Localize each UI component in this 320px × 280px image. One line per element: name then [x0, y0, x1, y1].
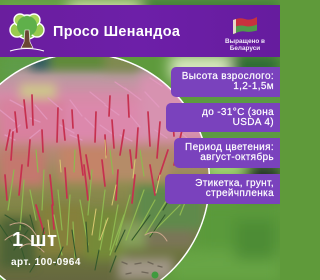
card: package contents [165, 174, 280, 204]
icon: Belarus flag [233, 17, 257, 34]
card: frost hardiness [166, 103, 280, 132]
photo: switchgrass in circular frame [0, 57, 210, 280]
title: Просо Шенандоа [53, 24, 180, 40]
card: frost hardiness: USDA 4) [233, 116, 274, 128]
card: package contents: стрейчпленка [206, 188, 274, 199]
card: adult height: 1,2-1,5м [233, 81, 274, 92]
card: adult height [171, 67, 280, 97]
quantity: 1 шт [12, 229, 58, 251]
card: frost hardiness: до -31°C (зона [202, 106, 274, 118]
card: flowering period: август-октябрь [200, 152, 274, 163]
card: adult height: Высота взрослого: [182, 71, 274, 82]
label: grown in Belarus: Выращено в Беларуси [225, 38, 265, 52]
logo: tree [9, 13, 45, 52]
card: flowering period: Период цветения: [185, 142, 274, 153]
card: flowering period [174, 138, 280, 168]
header band [0, 5, 280, 57]
article number: арт. 100-0964 [11, 257, 81, 268]
card: package contents: Этикетка, грунт, [195, 178, 274, 189]
